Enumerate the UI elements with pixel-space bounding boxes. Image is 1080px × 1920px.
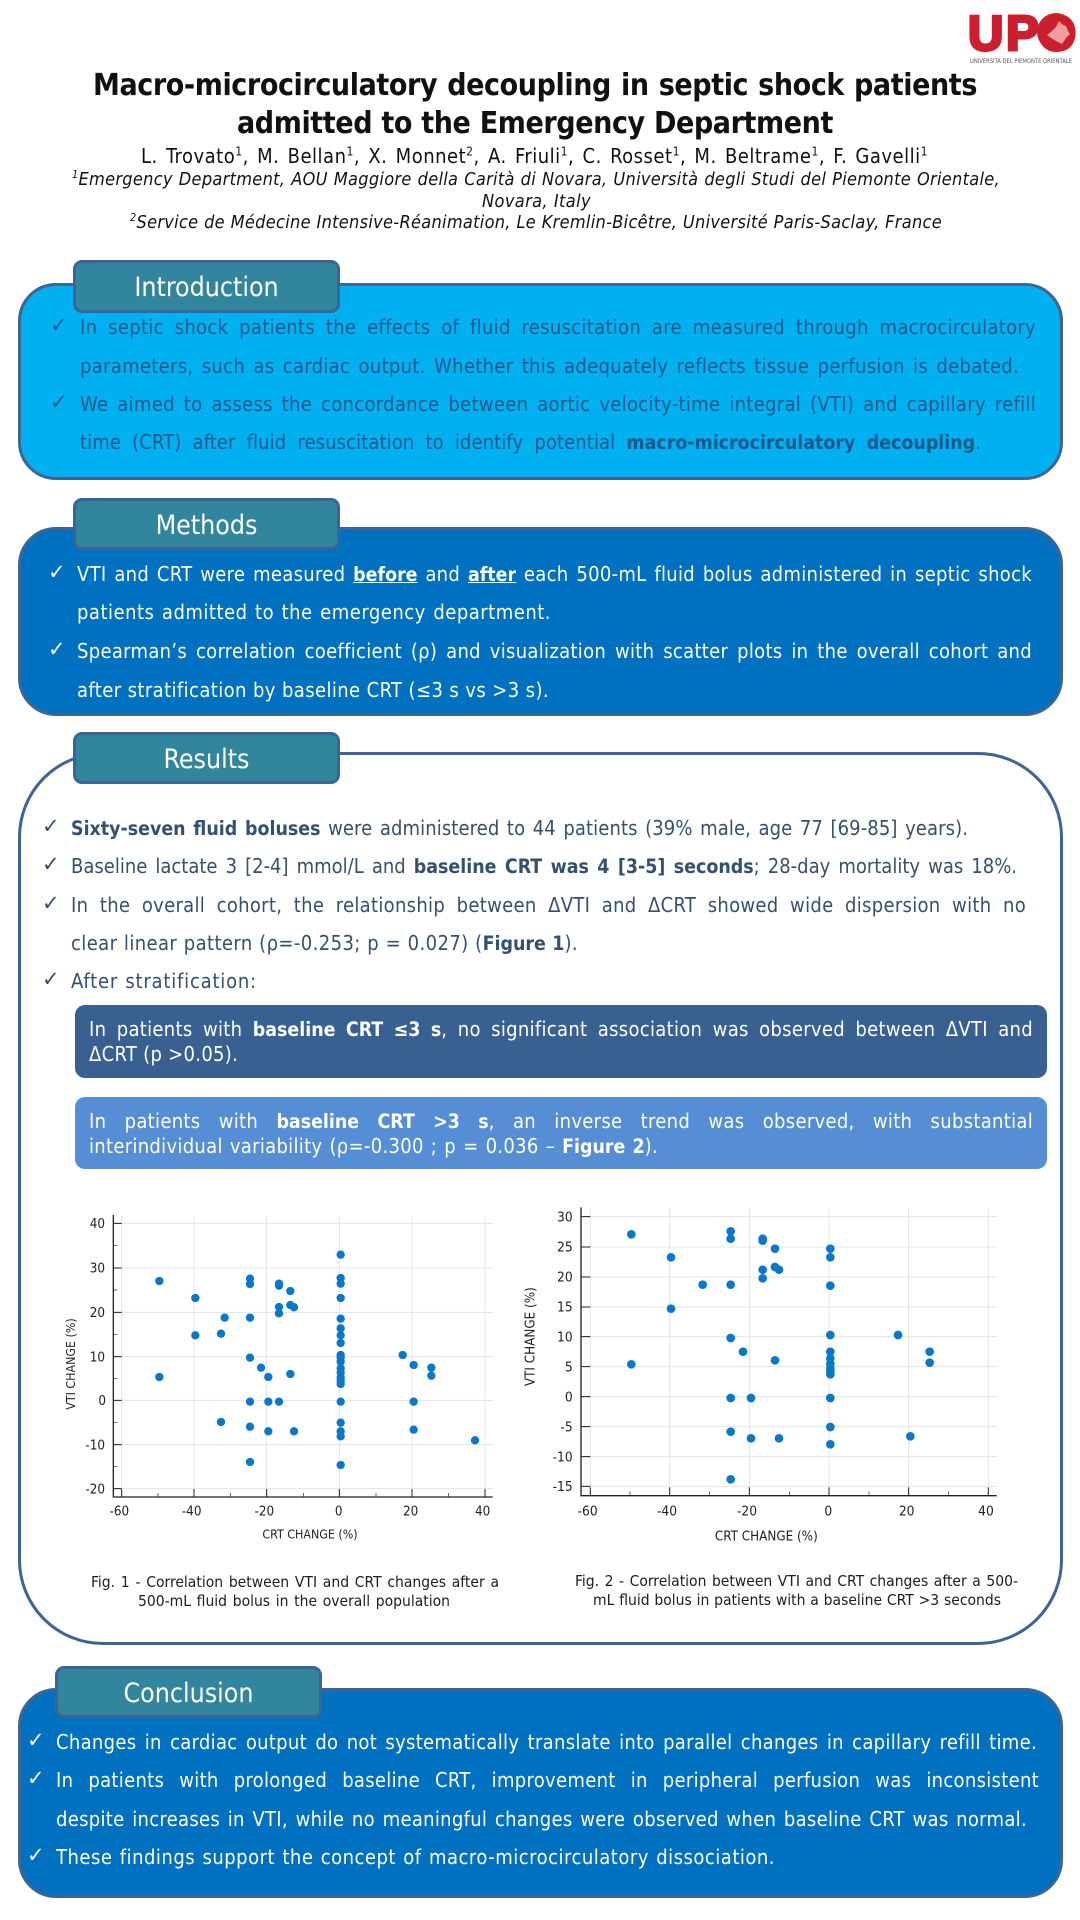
heading: introduction [73,260,340,313]
check mark: ✓ [42,967,60,991]
intro text 1 line 1: In septic shock patients the effects of fluid resuscitation are measured through macrocirculatory [80,315,1036,339]
heading: methods: Methods [156,510,257,540]
chart: figure 2 scatter plot: -40 [657,1503,677,1519]
chart: figure 2 scatter plot: -15 [553,1479,573,1495]
caption: figure 1: Fig. 1 - Correlation between VTI and CRT changes after a [91,1573,499,1591]
chart: figure 2 scatter plot: 5 [565,1359,573,1375]
methods text 2 line 2: after stratification by baseline CRT (≤3 s vs >3 s). [77,678,549,702]
chart: figure 1 scatter plot: CRT CHANGE (%) [262,1527,358,1541]
heading: conclusion [55,1666,322,1718]
chart: figure 1 scatter plot: 40 [90,1217,105,1232]
chart: figure 1 scatter plot: -60 [110,1504,129,1519]
methods text 1 line 2: patients admitted to the emergency department. [77,600,551,624]
callout: baseline CRT up to 3 s: In patients with baseline CRT ≤3 s, no significant association was observed between ΔVTI and [89,1017,1033,1041]
affiliation 1 continued: Novara, Italy [482,191,591,212]
heading: results [73,732,340,784]
caption: figure 2: Fig. 2 - Correlation between VTI and CRT changes after a 500- [575,1572,1018,1590]
callout: baseline CRT up to 3 s [75,1005,1047,1078]
chart: figure 2 scatter plot: -5 [560,1419,573,1435]
panel: results [18,732,1063,1645]
chart: figure 2 scatter plot: 20 [899,1503,914,1519]
results line 5: After stratification: [71,969,257,993]
intro text 2 line 2: time (CRT) after fluid resuscitation to identify potential macro-microcirculatory decoupling. [80,430,981,454]
check mark: ✓ [48,637,66,661]
affiliation 1: 1Emergency Department, AOU Maggiore della Carità di Novara, Università degli Studi del Piemonte Orientale, [72,168,1000,190]
conclusion line 3: despite increases in VTI, while no meaningful changes were observed when baseline CRT was normal. [56,1807,1027,1831]
chart: figure 2 scatter plot: CRT CHANGE (%) [715,1530,818,1545]
heading: introduction: Introduction [134,272,279,303]
results line 1: Sixty-seven fluid boluses were administered to 44 patients (39% male, age 77 [69-85] years). [71,816,968,840]
chart: figure 1 scatter plot: -20 [255,1504,274,1519]
methods text 2 line 1: Spearman’s correlation coefficient (ρ) and visualization with scatter plots in the overall cohort and [77,639,1032,663]
chart: figure 1 scatter plot: 20 [403,1504,418,1519]
conclusion line 1: Changes in cardiac output do not systematically translate into parallel changes in capillary refill time. [56,1730,1037,1754]
caption: figure 2 [575,1572,1018,1609]
check mark: ✓ [27,1728,45,1752]
check mark: ✓ [50,390,68,414]
logo: UPO university: UPO [968,7,1076,61]
check mark: ✓ [27,1843,45,1867]
results line 3: In the overall cohort, the relationship between ΔVTI and ΔCRT showed wide dispersion with no [71,893,1026,917]
chart: figure 1 scatter plot: 0 [98,1394,106,1409]
chart: figure 1 scatter plot: -40 [182,1504,201,1519]
check mark: ✓ [42,891,60,915]
caption: figure 1: 500-mL fluid bolus in the overall population [138,1592,450,1610]
chart: figure 1 scatter plot: 30 [90,1262,105,1277]
chart: figure 2 scatter plot: 20 [557,1270,573,1286]
chart: figure 2 scatter plot: -10 [553,1449,573,1465]
callout: baseline CRT up to 3 s: ΔCRT (p >0.05). [89,1042,238,1066]
chart: figure 1 scatter plot: 20 [90,1306,105,1321]
chart: figure 2 scatter plot: 0 [565,1389,573,1405]
results line 4: clear linear pattern (ρ=-0.253; p = 0.027) (Figure 1). [71,931,578,955]
check mark: ✓ [50,313,68,337]
chart: figure 2 scatter plot: 25 [557,1240,573,1256]
chart: figure 2 scatter plot: 15 [557,1300,573,1316]
chart: figure 2 scatter plot: 30 [557,1209,573,1225]
caption: figure 2: mL fluid bolus in patients with a baseline CRT >3 seconds [593,1591,1001,1609]
check mark: ✓ [27,1766,45,1790]
chart: figure 2 scatter plot: 40 [978,1503,994,1519]
chart: figure 1 scatter plot: -20 [85,1482,105,1497]
chart: figure 1 scatter plot [64,1215,493,1541]
chart: figure 1 scatter plot: 0 [335,1504,342,1519]
intro text 2 line 1: We aimed to assess the concordance between aortic velocity-time integral (VTI) and capillary refill [80,392,1036,416]
panel: introduction [18,260,1063,480]
callout: baseline CRT above 3 s [75,1097,1047,1169]
conclusion line 2: In patients with prolonged baseline CRT, improvement in peripheral perfusion was inconsistent [56,1768,1039,1792]
methods text 1 line 1: VTI and CRT were measured before and after each 500-mL fluid bolus administered in septic shock [77,562,1032,586]
authors: L. Trovato1, M. Bellan1, X. Monnet2, A. Friuli1, C. Rosset1, M. Beltrame1, F. Gavelli1 [141,144,928,168]
check mark: ✓ [42,814,60,838]
chart: figure 2 scatter plot: -60 [578,1503,598,1519]
callout: baseline CRT above 3 s: In patients with baseline CRT >3 s, an inverse trend was observed, with substantial [89,1109,1033,1133]
chart: figure 1 scatter plot: VTI CHANGE (%) [64,1318,78,1410]
chart: figure 2 scatter plot: -20 [737,1503,757,1519]
intro text 1 line 2: parameters, such as cardiac output. Whether this adequately reflects tissue perfusion is debated. [80,354,1019,378]
chart: figure 2 scatter plot: 10 [557,1329,573,1345]
chart: figure 1 scatter plot: 40 [475,1504,490,1519]
chart: figure 2 scatter plot [524,1207,997,1545]
header: title, authors and affiliations [72,68,1000,233]
affiliation 2: 2Service de Médecine Intensive-Réanimation, Le Kremlin-Bicêtre, Université Paris-Saclay, France [130,211,942,233]
chart: figure 2 scatter plot: 0 [824,1503,832,1519]
panel: conclusion [18,1666,1063,1898]
results line 2: Baseline lactate 3 [2-4] mmol/L and baseline CRT was 4 [3-5] seconds; 28-day mortality was 18%. [71,854,1017,878]
conclusion line 4: These findings support the concept of macro-microcirculatory dissociation. [56,1845,775,1869]
chart: figure 1 scatter plot: 10 [90,1350,105,1365]
heading: results: Results [164,744,249,774]
callout: baseline CRT above 3 s: interindividual variability (ρ=-0.300 ; p = 0.036 – Figure 2). [89,1134,658,1158]
panel: methods [18,498,1063,716]
title line 2: admitted to the Emergency Department [237,106,833,141]
heading: conclusion: Conclusion [124,1678,253,1708]
chart: figure 2 scatter plot: VTI CHANGE (%) [524,1287,539,1386]
caption: figure 1 [91,1573,499,1610]
heading: methods [73,498,340,550]
chart: figure 1 scatter plot: -10 [85,1438,105,1453]
logo: UPO university: UNIVERSITÀ DEL PIEMONTE ORIENTALE [970,56,1072,65]
title line 1: Macro-microcirculatory decoupling in septic shock patients [93,68,977,103]
check mark: ✓ [42,852,60,876]
check mark: ✓ [48,560,66,584]
